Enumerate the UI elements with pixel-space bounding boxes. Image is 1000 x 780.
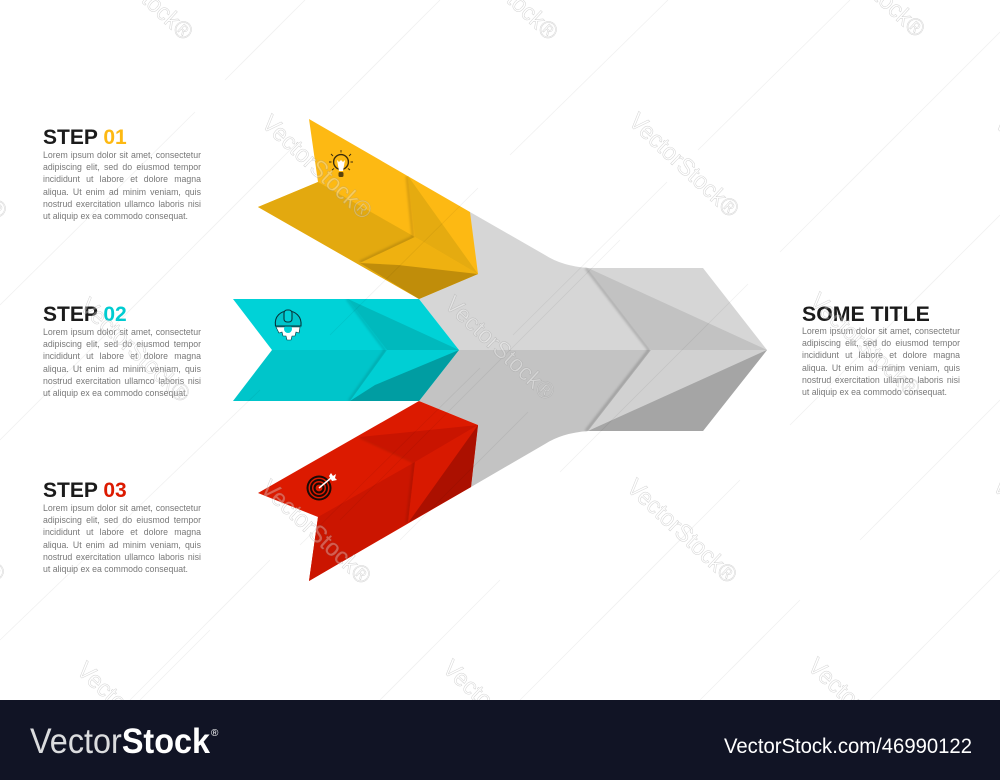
watermarks: VectorStock®: [255, 475, 376, 590]
watermarks: VectorStock®: [71, 657, 192, 772]
body text: step 03: aliqua. Ut enim ad minim veniam, quis: [43, 540, 201, 550]
icon: helmet and gear: [275, 310, 301, 340]
body text: some title: aliqua. Ut enim ad minim veniam, quis: [802, 363, 960, 373]
body text: step 03: incididunt ut labore et dolore magna: [43, 527, 201, 537]
banner logo: VectorStock: [30, 722, 210, 761]
yellow arrow: step 01: [258, 119, 478, 299]
footer banner: [0, 700, 1000, 780]
body text: step 03: adipiscing elit, sed do eiusmod tempor: [43, 515, 201, 525]
body text: step 02: adipiscing elit, sed do eiusmod tempor: [43, 339, 201, 349]
icon: light bulb: [329, 150, 353, 177]
watermarks: VectorStock®: [439, 291, 560, 406]
text block: step 03: [43, 479, 201, 574]
body text: step 02: nostrud exercitation ullamco laboris nisi: [43, 376, 201, 386]
body text: step 01: ut aliquip ex ea commodo consequat.: [43, 211, 188, 221]
watermarks: VectorStock®: [256, 110, 377, 225]
cyan arrow: step 02: [233, 299, 459, 401]
banner image id: VectorStock.com/46990122: [724, 735, 972, 758]
body text: some title: Lorem ipsum dolor sit amet, consectetur: [802, 326, 960, 336]
body text: step 01: aliqua. Ut enim ad minim veniam, quis: [43, 187, 201, 197]
text block: step 01: [43, 126, 201, 221]
body text: step 01: incididunt ut labore et dolore magna: [43, 174, 201, 184]
banner registered mark: ®: [211, 728, 219, 739]
body text: step 02: ut aliquip ex ea commodo consequat.: [43, 388, 188, 398]
red arrow: step 03: [258, 401, 478, 581]
watermarks: VectorStock®: [74, 293, 195, 408]
heading: step 01: STEP 01: [43, 126, 127, 149]
body text: step 03: nostrud exercitation ullamco laboris nisi: [43, 552, 201, 562]
heading: step 03: STEP 03: [43, 479, 127, 502]
body text: step 02: [43, 327, 201, 398]
body text: step 02: incididunt ut labore et dolore magna: [43, 351, 201, 361]
heading: step 02: STEP 02: [43, 303, 127, 326]
body text: some title: incididunt ut labore et dolore magna: [802, 350, 960, 360]
body text: step 02: Lorem ipsum dolor sit amet, consectetur: [43, 327, 201, 337]
watermarks: VectorStock®: [804, 288, 925, 403]
body text: step 03: [43, 503, 201, 574]
heading: some title: SOME TITLE: [802, 302, 930, 326]
body text: some title: nostrud exercitation ullamco laboris nisi: [802, 375, 960, 385]
body text: step 01: [43, 150, 201, 221]
body text: step 01: Lorem ipsum dolor sit amet, consectetur: [43, 150, 201, 160]
watermarks: VectorStock®: [623, 108, 744, 223]
body text: step 01: nostrud exercitation ullamco laboris nisi: [43, 199, 201, 209]
watermarks: VectorStock®: [802, 653, 923, 768]
watermarks: VectorStock®: [437, 655, 558, 770]
body text: step 02: aliqua. Ut enim ad minim veniam, quis: [43, 364, 201, 374]
body text: step 01: adipiscing elit, sed do eiusmod tempor: [43, 162, 201, 172]
text block: some title: [802, 302, 960, 397]
text block: step 02: [43, 303, 201, 398]
body text: step 03: ut aliquip ex ea commodo consequat.: [43, 564, 188, 574]
body text: step 03: Lorem ipsum dolor sit amet, consectetur: [43, 503, 201, 513]
grey main arrow: [419, 212, 767, 487]
icon: target with dart: [306, 473, 337, 500]
watermarks: VectorStock®: [621, 474, 742, 589]
body text: some title: adipiscing elit, sed do eiusmod tempor: [802, 338, 960, 348]
body text: some title: ut aliquip ex ea commodo consequat.: [802, 387, 947, 397]
body text: some title: [802, 326, 960, 397]
